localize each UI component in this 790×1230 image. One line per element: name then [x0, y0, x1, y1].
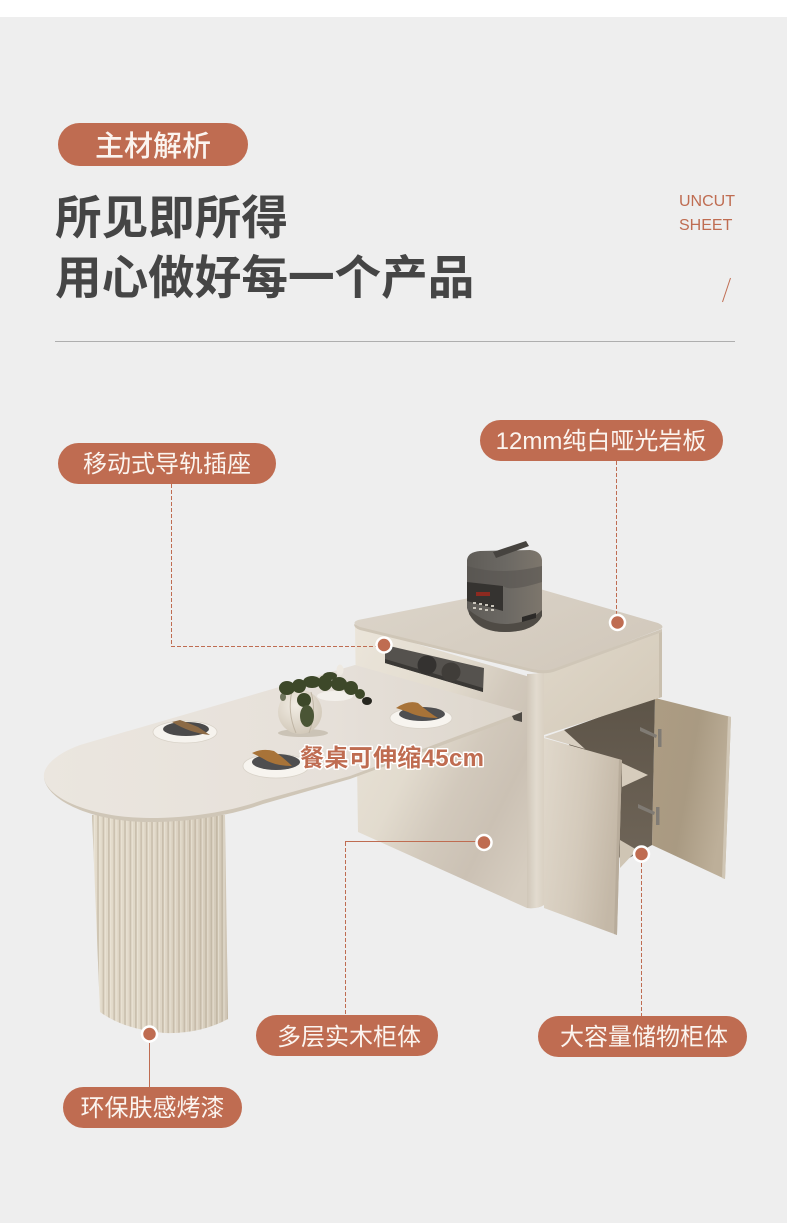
label: 12mm纯白哑光岩板 [480, 420, 723, 461]
label: 大容量储物柜体 [538, 1016, 747, 1057]
door hinges [638, 727, 662, 825]
label: 大容量储物柜体: 大容量储物柜体 [560, 1024, 728, 1051]
socket rail [385, 645, 484, 692]
interior shelves [620, 763, 648, 868]
marker: cabinet body [476, 835, 492, 850]
title: 用心做好每一个产品 [55, 252, 474, 304]
english label: UNCUT SHEET: SHEET [679, 217, 733, 234]
open left door [544, 738, 622, 935]
marker: worktop [610, 615, 625, 630]
back plate [317, 691, 353, 701]
slash accent [722, 278, 730, 302]
label: 多层实木柜体 [256, 1015, 438, 1056]
label: 移动式导轨插座: 移动式导轨插座 [83, 451, 251, 478]
vase with plant [278, 664, 372, 737]
callout: 餐桌可伸缩45cm: 餐桌可伸缩45cm [300, 745, 484, 772]
opening top lip [544, 730, 585, 749]
fluted column [92, 815, 228, 1033]
label: 移动式导轨插座 [58, 443, 276, 484]
label: 环保肤感烤漆: 环保肤感烤漆 [80, 1095, 224, 1122]
rice cooker [467, 541, 542, 632]
leader line: 多层实木柜体 [345, 842, 476, 1015]
badge: 主材解析 [58, 123, 248, 166]
cabinet left face [355, 626, 544, 908]
label: 多层实木柜体: 多层实木柜体 [277, 1024, 421, 1051]
drawer front [544, 631, 662, 735]
cabinet rounded corner [527, 672, 544, 908]
english label: UNCUT SHEET [679, 193, 735, 234]
title: 所见即所得 [55, 192, 288, 244]
product illustration: extending dining cabinet [44, 541, 731, 1033]
leader line: 大容量储物柜体 [640, 863, 642, 1016]
plate: left [153, 720, 217, 743]
open right door [652, 698, 731, 879]
marker: column finish [142, 1026, 157, 1042]
cabinet interior [564, 697, 655, 862]
plate: front [243, 750, 309, 778]
extending table top [44, 665, 522, 822]
leader line: 移动式导轨插座 [172, 484, 376, 646]
marker: storage [634, 846, 649, 862]
leader line: 12mm岩板 [616, 461, 618, 614]
worktop slab [354, 587, 662, 671]
title [55, 192, 474, 304]
english label: UNCUT SHEET: UNCUT [679, 193, 735, 210]
label: 环保肤感烤漆 [63, 1087, 242, 1128]
marker: socket [376, 638, 392, 652]
plate: right [390, 702, 452, 728]
badge: 主材解析: 主材解析 [95, 130, 211, 163]
label: 12mm纯白哑光岩板: 12mm纯白哑光岩板 [496, 428, 706, 455]
leader line: 环保肤感烤漆 [148, 1043, 150, 1087]
